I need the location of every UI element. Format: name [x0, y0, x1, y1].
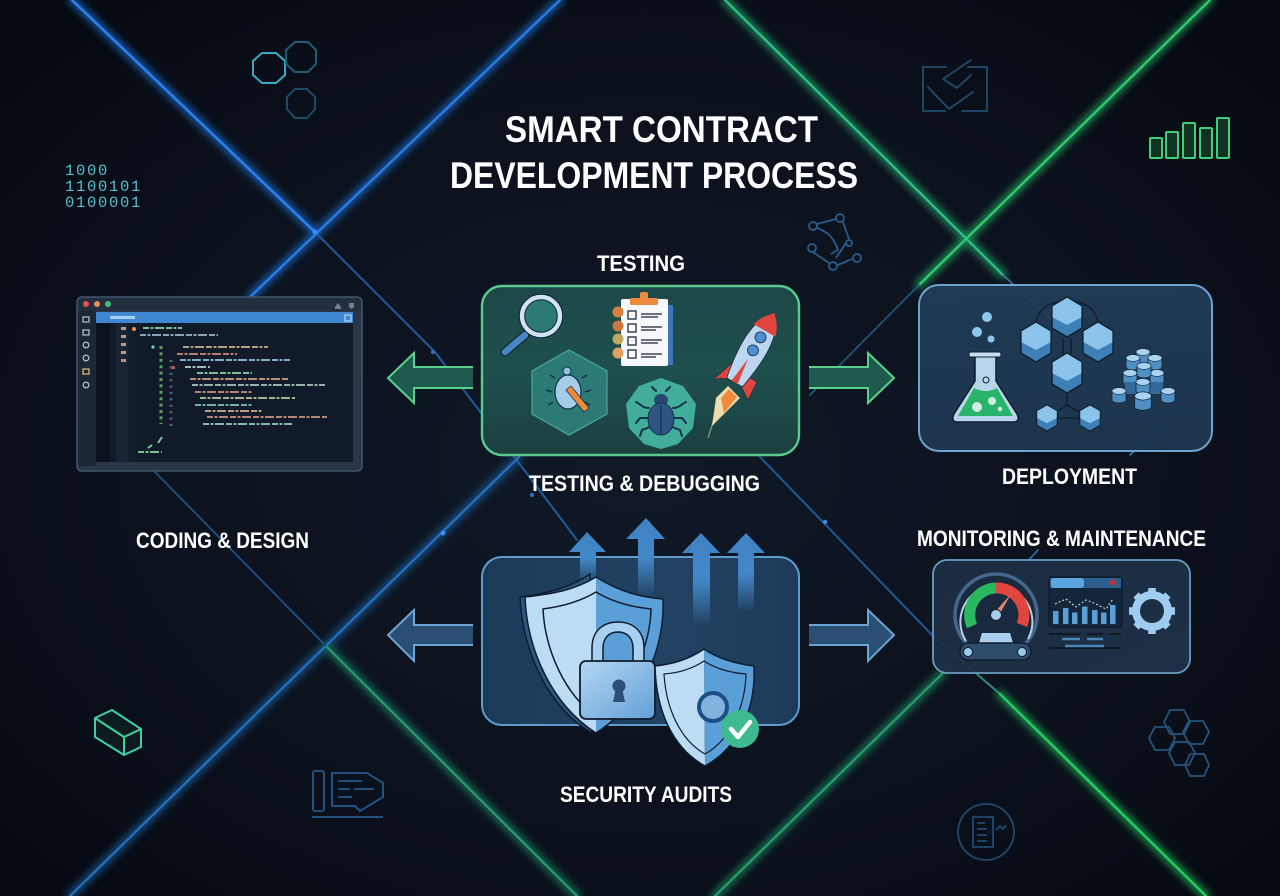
label: security audits: SECURITY AUDITS	[560, 782, 732, 807]
icon: circled document	[958, 804, 1014, 860]
icon: rocket	[708, 306, 786, 438]
panel: coding and design window	[77, 297, 362, 471]
icon: node network	[808, 214, 861, 270]
icon: signal bars	[1150, 118, 1229, 158]
panel: deployment	[919, 285, 1212, 451]
icon: small shield with check	[655, 649, 759, 766]
icon: gauge	[955, 574, 1037, 660]
arrow: green left	[388, 353, 473, 403]
icon: checklist clipboard	[612, 292, 673, 366]
arrow: green right	[809, 353, 894, 403]
arrow: blue right	[809, 610, 894, 661]
icon: framed check	[923, 60, 987, 111]
title: DEVELOPMENT PROCESS	[450, 155, 858, 196]
label: testing: TESTING	[597, 251, 685, 276]
icon: large shield	[520, 574, 663, 733]
arrow: blue left	[388, 610, 473, 661]
icon: magnifying glass	[505, 297, 560, 352]
icon: dashboard chart	[1049, 577, 1122, 648]
icon: gear	[1129, 588, 1175, 634]
icon: beetle badge	[626, 378, 696, 449]
icon: document speech bubble	[312, 771, 383, 817]
label: monitoring and maintenance: MONITORING & MAINTENANCE	[917, 526, 1206, 551]
title: SMART CONTRACT	[505, 109, 818, 150]
title	[450, 109, 858, 196]
binary text: 0100001	[65, 194, 142, 212]
label: testing and debugging: TESTING & DEBUGGING	[529, 471, 760, 496]
binary text: 1100101	[65, 178, 142, 196]
icon: padlock	[580, 622, 655, 719]
icon: block network	[1021, 297, 1113, 431]
panel: monitoring and maintenance	[933, 560, 1190, 673]
label: coding and design: CODING & DESIGN	[136, 528, 309, 553]
binary text: 1000	[65, 162, 109, 180]
icon: flask	[953, 312, 1018, 422]
icon: hexagon cluster	[1149, 710, 1209, 776]
binary text	[65, 162, 142, 212]
icon: hexagon bug with pencil	[532, 350, 607, 435]
icon: wire cube	[95, 710, 141, 755]
label: deployment: DEPLOYMENT	[1002, 464, 1137, 489]
panel: testing and debugging	[482, 286, 799, 455]
icon: database stack	[1112, 349, 1175, 410]
icon: octagon cluster	[253, 42, 316, 118]
icon: upward arrows	[569, 518, 765, 625]
panel: security audits	[482, 518, 799, 766]
